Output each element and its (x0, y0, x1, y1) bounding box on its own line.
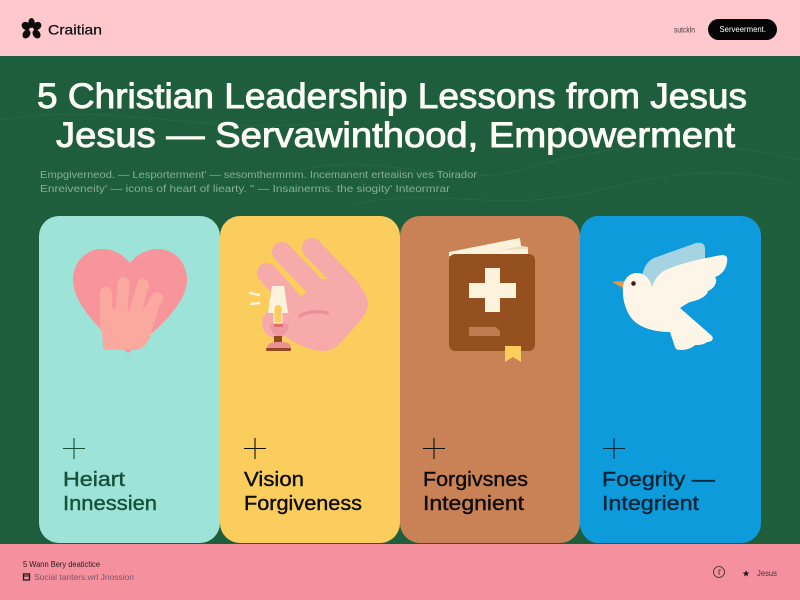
icon: bible with cross (449, 238, 535, 362)
footer band (0, 544, 800, 600)
icon: calendar (24, 574, 30, 580)
subtitle (40, 169, 478, 195)
icon: dove (612, 243, 727, 350)
card label: Vision (244, 469, 304, 491)
card label: Foegrity — (602, 469, 715, 491)
subtitle: Enreiveneity' — icons of heart of liearty. " — Insainerms. the siogity' Inteormrar (40, 183, 451, 195)
plus icon (423, 438, 445, 459)
header button (708, 19, 777, 40)
title (37, 77, 747, 155)
icon: circle (714, 566, 724, 578)
icon: flower logo (20, 18, 43, 40)
card label: Heiart (63, 469, 126, 491)
header button: Serveerment. (720, 25, 766, 34)
header band (0, 0, 800, 56)
plus icon (603, 438, 625, 459)
card label: Forgivsnes (423, 469, 528, 491)
panel: book (400, 216, 580, 543)
card label: Innessien (63, 493, 157, 515)
panel: heart (39, 216, 220, 543)
light rays (250, 293, 259, 304)
plus icon (244, 438, 266, 459)
lamp (262, 286, 292, 351)
panel: dove (580, 216, 761, 543)
card label (602, 469, 715, 515)
header link: sutckln (674, 26, 695, 34)
footer text: 5 Wann Bery deatictice (23, 560, 101, 569)
title: Jesus — Servawinthood, Empowerment (56, 116, 735, 155)
title: 5 Christian Leadership Lessons from Jesus (37, 77, 747, 116)
card label: Forgiveness (244, 493, 362, 515)
subtitle: Empgiverneod. — Lesporterment' — sesomthermmm. Incemanent erteaiisn ves Toirador (40, 169, 478, 181)
card label (244, 469, 362, 515)
icon: hand with lamp (250, 248, 368, 351)
card label: Integnient (423, 493, 525, 515)
panel: lamp (220, 216, 400, 543)
card label: Integrient (602, 493, 700, 515)
plus icon (63, 438, 85, 459)
card label (423, 469, 528, 515)
card label (63, 469, 157, 515)
brand name: Craitian (48, 22, 102, 38)
icon: star: ★ (742, 568, 750, 578)
icon: heart and hand (73, 249, 187, 353)
footer note: Social tanters.wrl Jnossion (34, 573, 134, 582)
footer author: Jesus (757, 569, 777, 578)
